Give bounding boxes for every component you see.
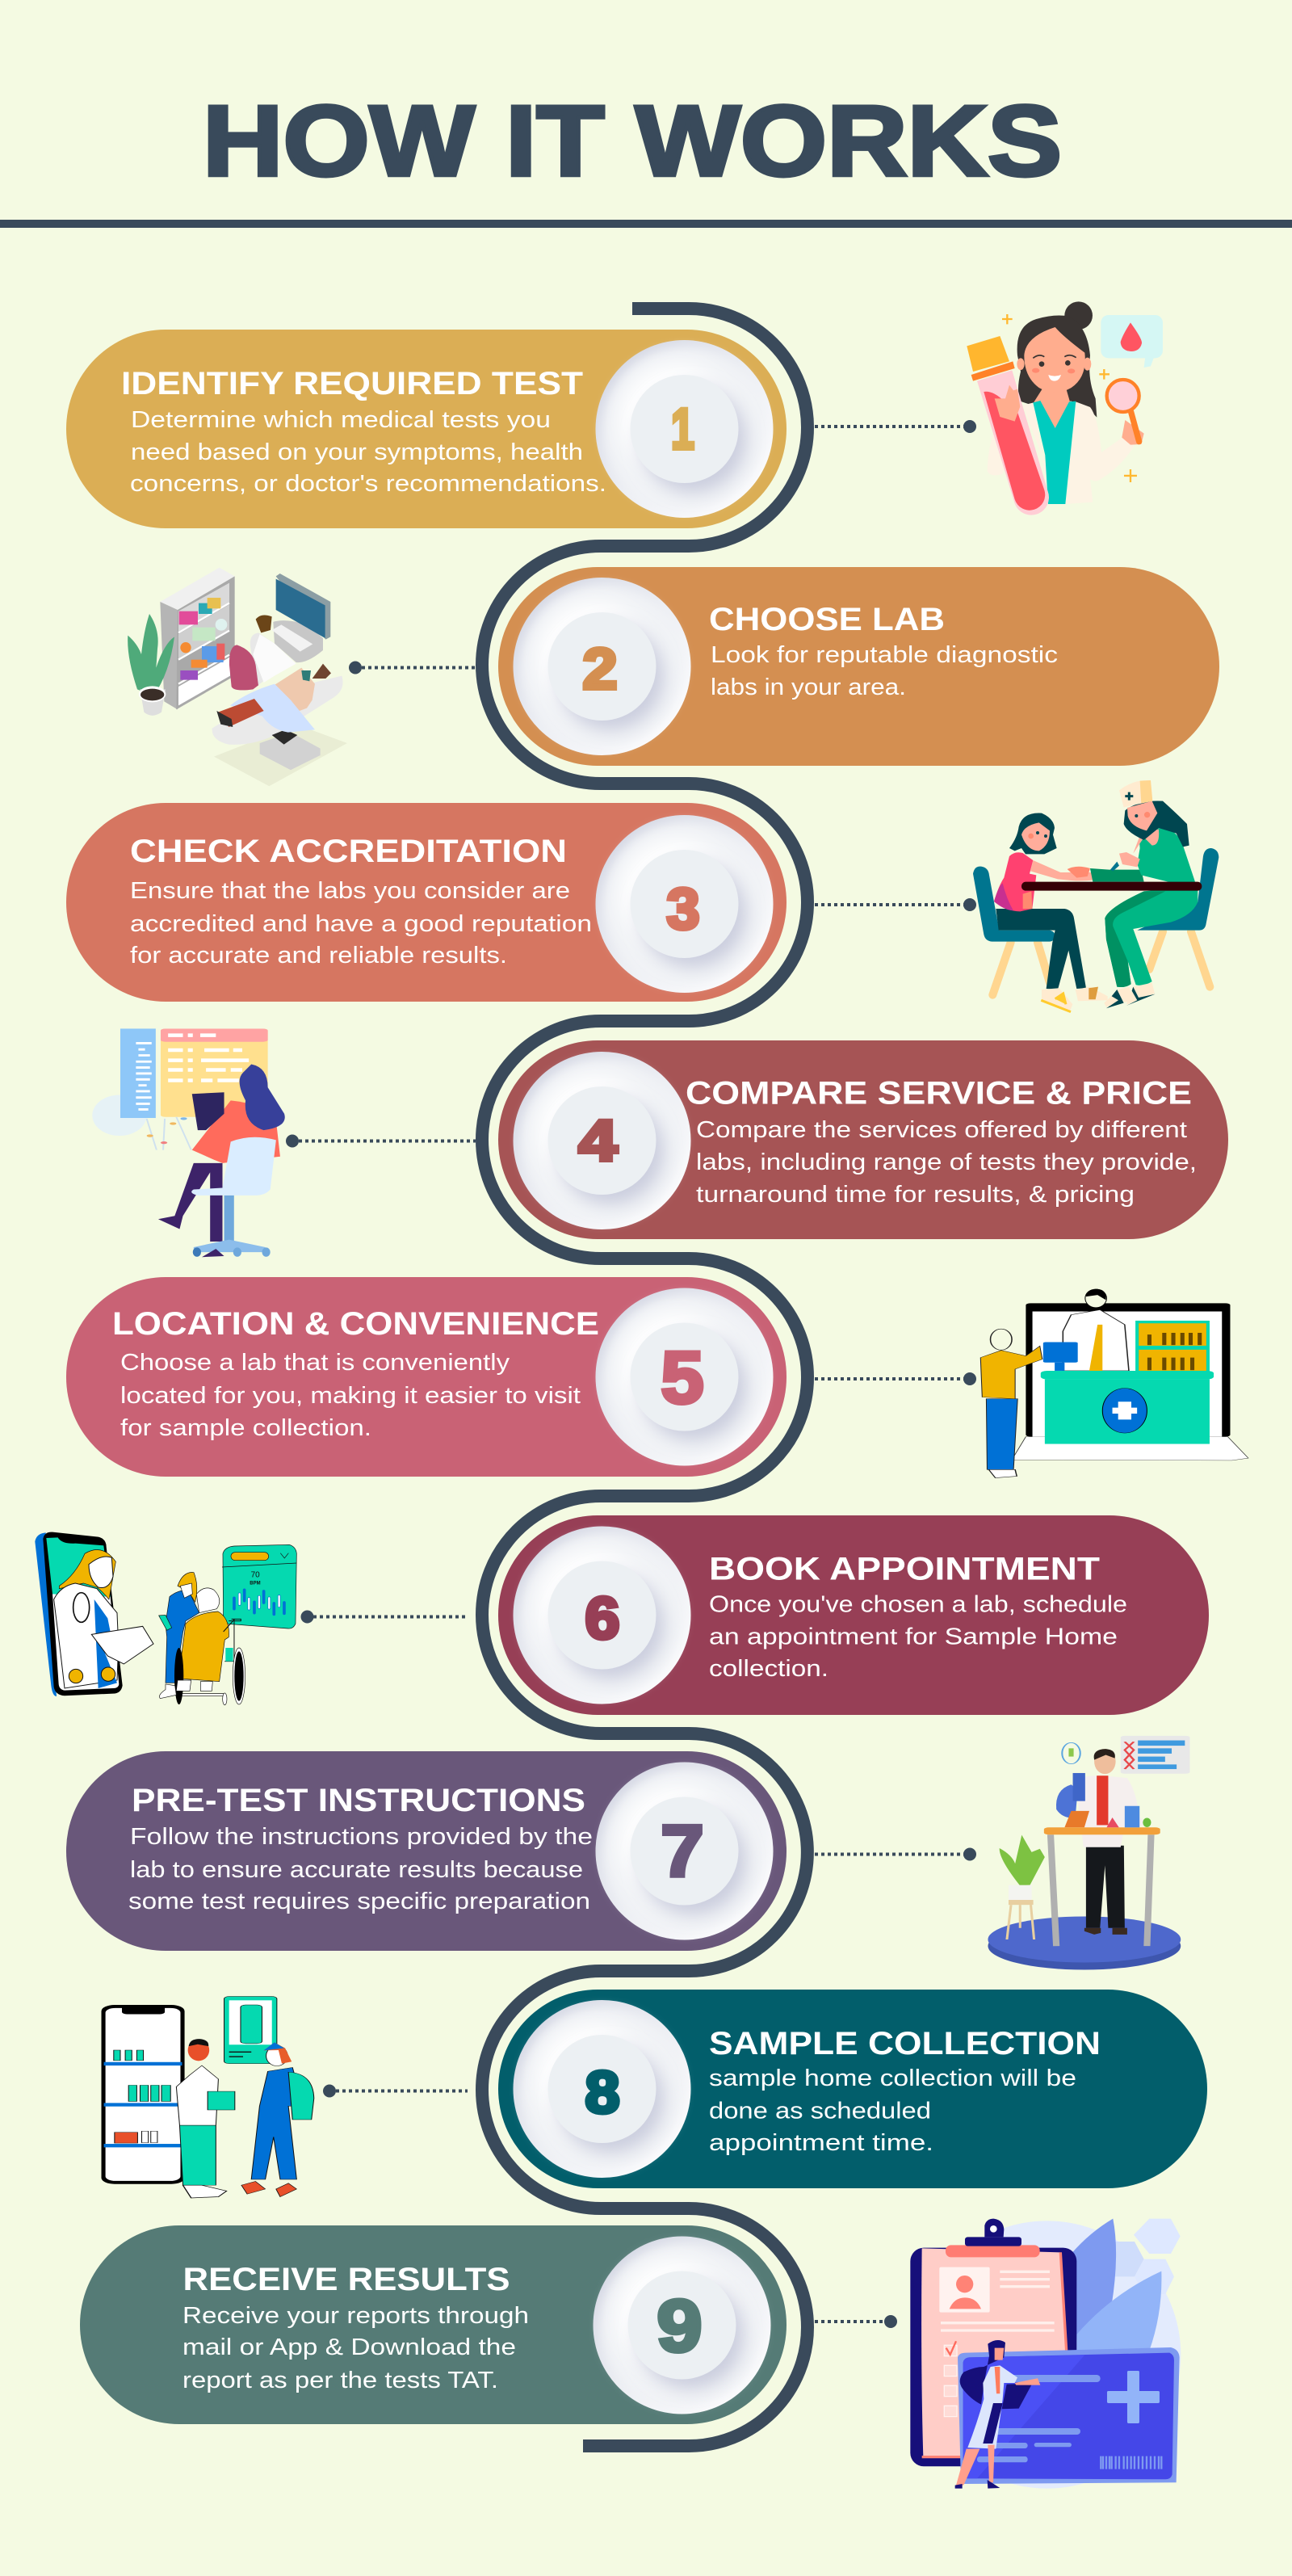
- step 8: [498, 1990, 1207, 2188]
- step 1: [66, 330, 787, 528]
- number 4: 4: [578, 1110, 618, 1173]
- number plate 7: [596, 1763, 774, 1940]
- number 9: 9: [657, 2286, 703, 2367]
- body 5: Choose a lab that is conveniently: [120, 1350, 510, 1376]
- body 4: Compare the services offered by different: [696, 1117, 1187, 1143]
- number plate 9: [593, 2236, 770, 2414]
- illustration 9: clipboard report and health card: [910, 2219, 1181, 2489]
- step 7: [66, 1751, 787, 1951]
- heading 1: IDENTIFY REQUIRED TEST: [121, 366, 583, 401]
- illustration 4: woman with data dashboard: [92, 1028, 285, 1257]
- step 9: [80, 2225, 787, 2424]
- number plate 3: [596, 815, 774, 993]
- body 9: Receive your reports through: [182, 2303, 529, 2329]
- number plate 5: [596, 1288, 774, 1465]
- title: HOW IT WORKS: [203, 86, 1062, 197]
- body 6: Once you've chosen a lab, schedule: [709, 1591, 1127, 1617]
- number 7: 7: [661, 1811, 704, 1892]
- connector 2: [349, 661, 476, 674]
- heading 8: SAMPLE COLLECTION: [709, 2026, 1101, 2061]
- number plate 2: [514, 578, 691, 755]
- body 9: report as per the tests TAT.: [182, 2368, 498, 2393]
- pill 5: [66, 1277, 787, 1477]
- heading 6: BOOK APPOINTMENT: [709, 1551, 1100, 1586]
- illustration 1: lab woman with test tube: [967, 301, 1163, 515]
- step 2: [498, 567, 1219, 766]
- illustration 8: collector and doctor by phone: [102, 1997, 314, 2198]
- body 3: for accurate and reliable results.: [130, 943, 507, 969]
- illustration 7: scientist at lab table: [988, 1736, 1189, 1970]
- body 1: need based on your symptoms, health: [131, 439, 583, 465]
- body 6: an appointment for Sample Home: [709, 1624, 1118, 1649]
- serpentine connector path: [482, 309, 808, 2446]
- connector 7: [815, 1848, 976, 1861]
- illustration 6: telehealth phone and wheelchair patient: BPM: [250, 1582, 261, 1586]
- pill 8: [498, 1990, 1207, 2188]
- body 4: labs, including range of tests they provide,: [696, 1149, 1197, 1175]
- body 1: Determine which medical tests you: [131, 407, 551, 433]
- connector 3: [815, 898, 976, 911]
- body 1: concerns, or doctor's recommendations.: [130, 471, 606, 497]
- pill 2: [498, 567, 1219, 766]
- connector 9: [815, 2315, 897, 2328]
- number 6: 6: [585, 1586, 620, 1651]
- number plate 4: [514, 1052, 691, 1229]
- pill 1: [66, 330, 787, 528]
- connector 8: [323, 2084, 468, 2097]
- body 8: done as scheduled: [709, 2099, 931, 2124]
- heading 2: CHOOSE LAB: [709, 602, 945, 637]
- body 3: Ensure that the labs you consider are: [130, 878, 570, 904]
- number plate 8: [514, 2000, 691, 2178]
- body 8: appointment time.: [709, 2130, 933, 2156]
- connector 5: [815, 1372, 976, 1385]
- body 8: sample home collection will be: [709, 2065, 1076, 2091]
- illustration 6: telehealth phone and wheelchair patient: [35, 1532, 296, 1705]
- pill 3: [66, 803, 787, 1002]
- pill 6: [498, 1515, 1209, 1715]
- heading 3: CHECK ACCREDITATION: [130, 834, 567, 869]
- heading 7: PRE-TEST INSTRUCTIONS: [132, 1783, 585, 1818]
- step 6: [498, 1515, 1209, 1715]
- heading 4: COMPARE SERVICE & PRICE: [686, 1076, 1192, 1112]
- title rule: [0, 220, 1292, 228]
- body 7: lab to ensure accurate results because: [130, 1857, 583, 1883]
- body 7: some test requires specific preparation: [128, 1889, 590, 1914]
- body 2: Look for reputable diagnostic: [711, 642, 1058, 668]
- step 5: [66, 1277, 787, 1477]
- step 3: [66, 803, 787, 1002]
- illustration 2: clinic scan room: [128, 568, 347, 786]
- pill 7: [66, 1751, 787, 1951]
- step 4: [498, 1040, 1228, 1239]
- number 8: 8: [585, 2060, 620, 2126]
- body 3: accredited and have a good reputation: [130, 911, 592, 937]
- heading 9: RECEIVE RESULTS: [182, 2262, 510, 2297]
- connector 1: [815, 420, 976, 433]
- body 6: collection.: [709, 1656, 828, 1682]
- body 7: Follow the instructions provided by the: [130, 1824, 593, 1850]
- number 3: 3: [667, 877, 699, 942]
- illustration 3: nurse taking blood sample: [973, 780, 1219, 1012]
- body 2: labs in your area.: [711, 674, 906, 700]
- number plate 1: [596, 340, 774, 518]
- body 4: turnaround time for results, & pricing: [696, 1182, 1135, 1208]
- number 1: 1: [671, 397, 694, 462]
- connector 4: [286, 1134, 476, 1147]
- pill 4: [498, 1040, 1228, 1239]
- heading 5: LOCATION & CONVENIENCE: [112, 1306, 599, 1342]
- number plate 6: [514, 1527, 691, 1704]
- body 9: mail or App & Download the: [182, 2334, 516, 2360]
- body 5: located for you, making it easier to visit: [120, 1383, 581, 1409]
- illustration 5: pharmacy on laptop: [980, 1289, 1248, 1478]
- number 2: 2: [583, 638, 617, 701]
- number 5: 5: [661, 1338, 704, 1418]
- illustration 6: telehealth phone and wheelchair patient: 70: [251, 1571, 260, 1580]
- connector 6: [300, 1611, 468, 1624]
- pill 9: [80, 2225, 787, 2424]
- body 5: for sample collection.: [120, 1415, 371, 1441]
